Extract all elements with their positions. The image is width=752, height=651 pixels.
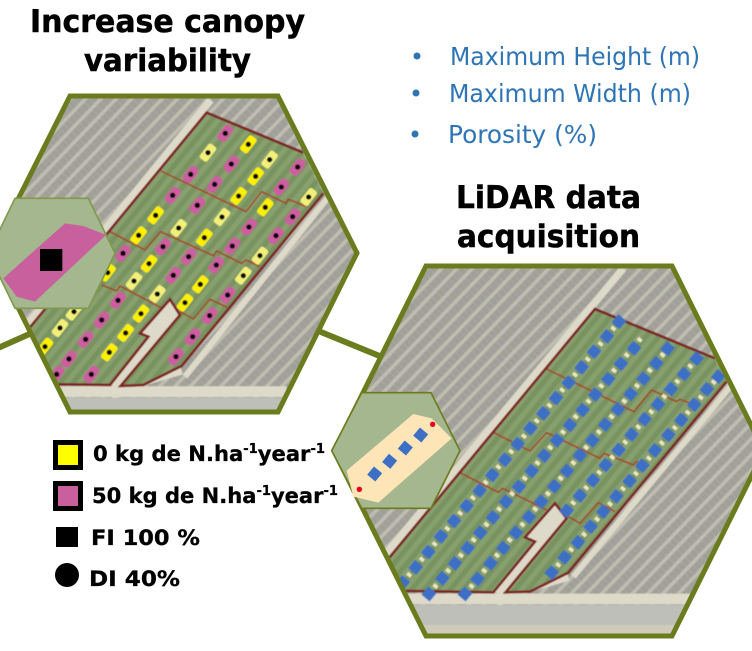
- LiDAR points: [395, 314, 726, 601]
- inset: left hexagon detail: [0, 198, 115, 308]
- title: LiDAR data acquisition: LiDAR data: [456, 180, 641, 216]
- title: increase canopy variability: Increase canopy: [30, 4, 305, 40]
- panel: right hexagon field map: [330, 260, 752, 640]
- title: increase canopy variability: [30, 4, 305, 79]
- panel: left hexagon field map: [0, 90, 370, 420]
- legend: -1: [243, 442, 258, 457]
- legend: -1: [324, 484, 338, 499]
- legend: 0 kg de N.ha: [93, 442, 242, 466]
- bullet list: measured variables: Porosity (%): [448, 120, 597, 149]
- field plot: [389, 309, 727, 592]
- road strips: [25, 100, 327, 398]
- bullet list: measured variables: Maximum Height (m): [450, 42, 700, 71]
- legend: year: [271, 484, 324, 508]
- field plot: [30, 113, 323, 386]
- legend: year: [258, 442, 311, 466]
- legend: DI 40%: [89, 567, 180, 591]
- legend: [55, 442, 338, 591]
- bullet list: measured variables: Maximum Width (m): [449, 79, 691, 108]
- title: increase canopy variability: variability: [84, 43, 251, 79]
- legend: -1: [256, 484, 271, 499]
- legend: FI 100 %: [91, 526, 200, 550]
- tree dashes: [403, 322, 718, 594]
- legend: -1: [310, 442, 325, 457]
- legend: 50 kg de N.ha: [92, 484, 256, 508]
- title: LiDAR data acquisition: [456, 180, 641, 255]
- title: LiDAR data acquisition: acquisition: [457, 219, 640, 255]
- inset: right hexagon detail: [332, 393, 460, 508]
- treatment markers: [36, 123, 318, 384]
- road strips: [385, 268, 732, 605]
- connector lines: [0, 330, 382, 357]
- bullet list: measured variables: [412, 42, 700, 149]
